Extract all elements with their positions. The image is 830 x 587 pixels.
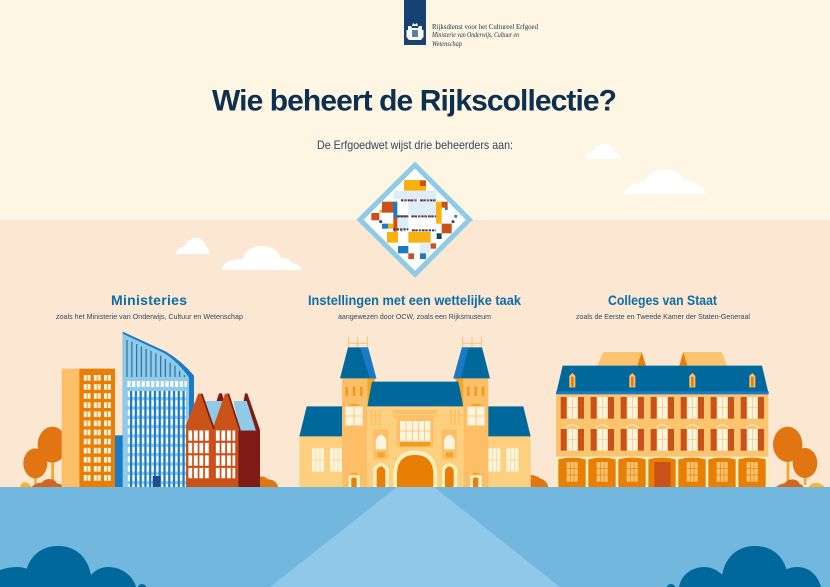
left dark bushes	[0, 546, 146, 587]
spires	[348, 337, 482, 347]
background: upper sky	[0, 0, 830, 220]
blue tower	[115, 332, 194, 487]
middle windows	[561, 425, 764, 451]
heading: Instellingen	[308, 292, 521, 321]
subheading: Ministeries: zoals het Ministerie van Onderwijs, Cultuur en Wetenschap	[56, 312, 243, 321]
diamond emblem with collection pattern	[360, 165, 469, 274]
illustration: ministries	[20, 332, 278, 487]
background: lower sky	[0, 220, 830, 490]
wings	[299, 406, 531, 488]
heading: Colleges van Staat	[576, 292, 750, 321]
heading: Colleges van Staat: Colleges van Staat	[608, 292, 717, 308]
top roofs	[597, 352, 727, 366]
facade	[556, 393, 768, 488]
subtitle: De Erfgoedwet wijst drie beheerders aan:	[317, 138, 513, 152]
towers	[340, 347, 490, 488]
heading: Ministeries: Ministeries	[111, 292, 187, 308]
water	[0, 487, 830, 587]
illustration: Rijksmuseum	[299, 337, 549, 488]
clouds: white	[176, 144, 705, 270]
logo ribbon with emblem	[404, 0, 426, 45]
upper windows	[561, 397, 764, 419]
diamond mosaic	[371, 180, 457, 259]
illustration: Colleges van Staat	[556, 352, 825, 488]
right trees	[773, 427, 825, 487]
museum bush	[531, 475, 549, 488]
logo text: Ministerie van Onderwijs, Cultuur en	[431, 32, 520, 39]
orange tower	[62, 369, 115, 487]
logo text: Rijksdienst voor het Cultureel Erfgoed	[432, 23, 538, 31]
brick building	[186, 393, 260, 487]
side arched windows	[376, 435, 455, 449]
left trees	[20, 427, 67, 487]
subheading: Colleges van Staat: zoals de Eerste en Tweede Kamer der Staten-Generaal	[576, 312, 750, 321]
central roof and wall	[367, 382, 463, 488]
bush	[260, 477, 278, 487]
heading: Instellingen: Instellingen met een wettelijke taak	[308, 292, 521, 308]
main arch	[373, 451, 457, 488]
logo text	[431, 23, 538, 48]
central window	[400, 421, 430, 446]
central path	[270, 487, 560, 587]
right dark bushes	[667, 546, 821, 587]
main roof	[556, 366, 769, 394]
diamond frame	[360, 165, 469, 274]
title: Wie beheert de Rijkscollectie?	[212, 84, 617, 118]
logo: Rijksdienst voor het Cultureel Erfgoed	[404, 0, 538, 48]
ground floor	[556, 457, 768, 488]
subheading: Instellingen: aangewezen door OCW, zoals een Rijksmuseum	[338, 312, 491, 321]
logo text: Wetenschap	[432, 41, 463, 48]
heading: Ministeries	[56, 292, 243, 321]
